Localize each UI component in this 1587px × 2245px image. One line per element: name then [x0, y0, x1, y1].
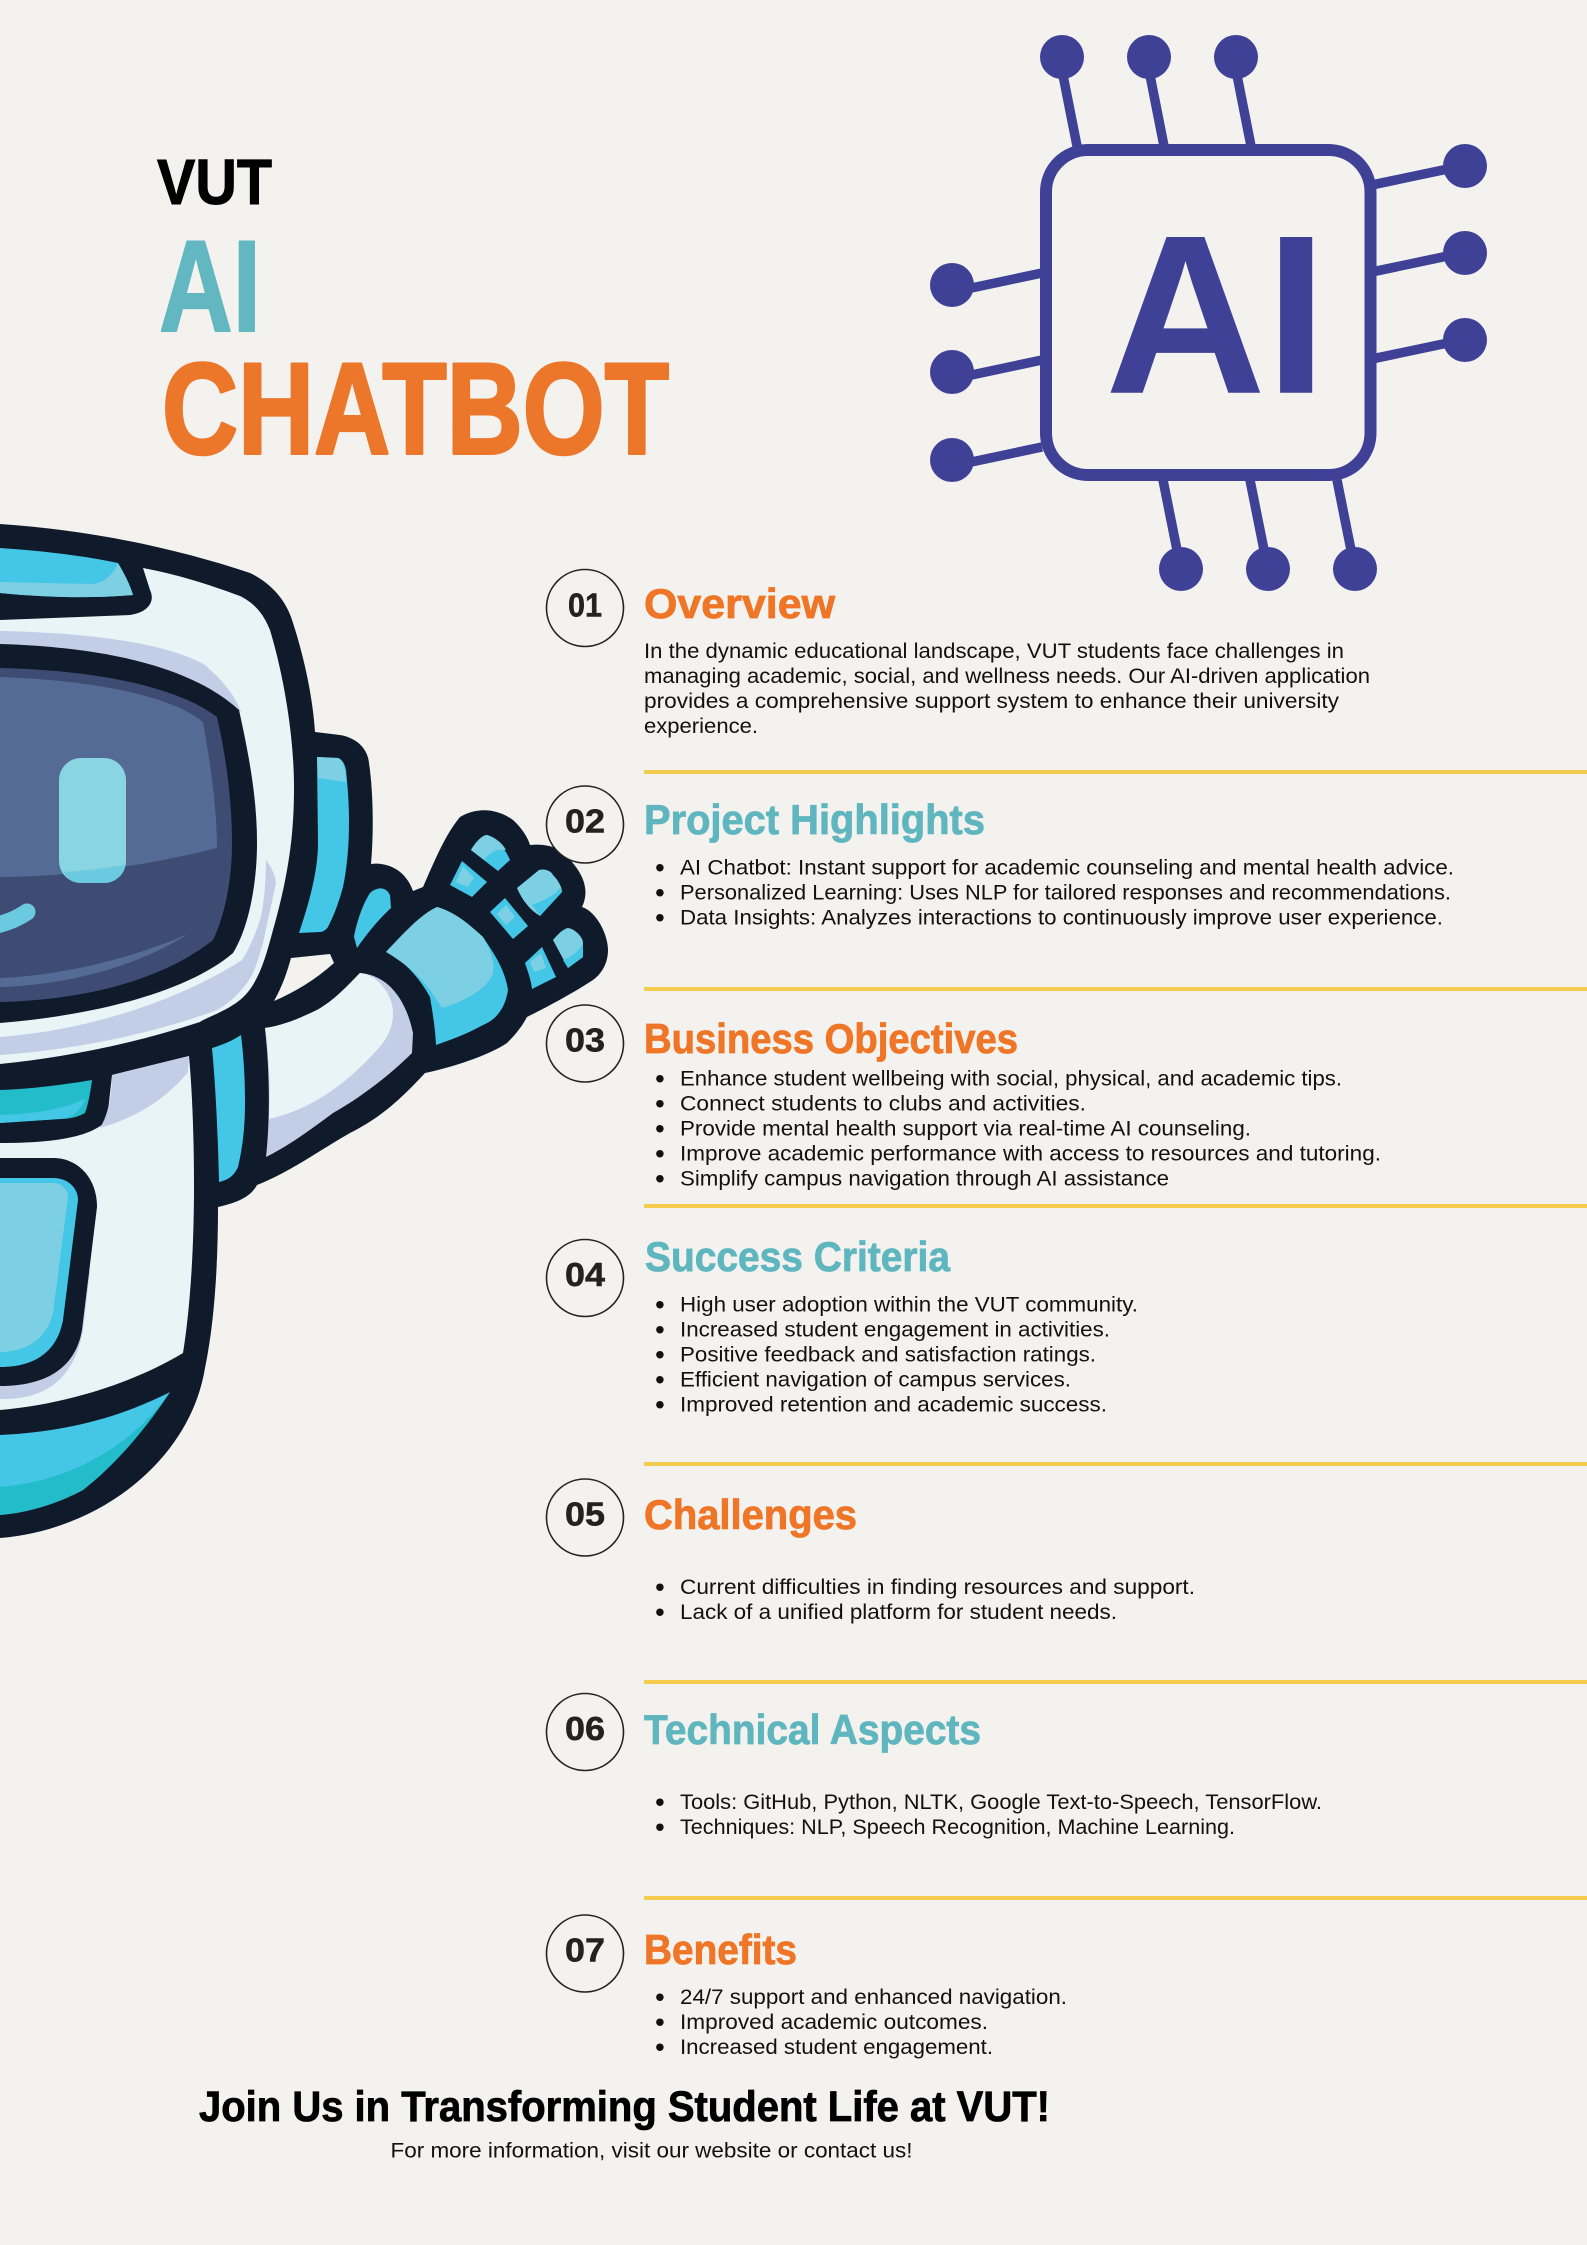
- number badge 05: 05: [565, 1496, 605, 1532]
- heading: business objectives: Business Objectives: [644, 1015, 1018, 1062]
- success criteria list: Increased student engagement in activities.: [680, 1318, 1110, 1342]
- overview paragraph: [644, 640, 1370, 738]
- business objectives list: •: [655, 1138, 665, 1169]
- number badge 03: 03: [565, 1022, 605, 1058]
- robot neck: [0, 1080, 92, 1123]
- section 02: project highlights: [546, 786, 1454, 933]
- footer note: For more information, visit our website or contact us!: [390, 2140, 912, 2162]
- footer call to action: [199, 2083, 1050, 2162]
- number badge 01: [546, 570, 624, 646]
- number badge 04: 04: [565, 1256, 606, 1293]
- business objectives list: Improve academic performance with access to resources and tutoring.: [680, 1142, 1381, 1166]
- section 06: technical aspects: [546, 1694, 1322, 1842]
- business objectives list: Enhance student wellbeing with social, physical, and academic tips.: [680, 1068, 1342, 1090]
- robot ear: [299, 757, 349, 933]
- technical aspects list: •: [655, 1812, 665, 1842]
- technical aspects list: Techniques: NLP, Speech Recognition, Machine Learning.: [680, 1816, 1235, 1839]
- heading: overview: Overview: [644, 580, 835, 627]
- benefits list: Improved academic outcomes.: [680, 2011, 988, 2034]
- success criteria list: •: [655, 1364, 665, 1395]
- number badge 02: [546, 786, 624, 863]
- section 01: overview: [546, 570, 1370, 738]
- business objectives list: •: [655, 1088, 665, 1119]
- business objectives list: [655, 1063, 1381, 1194]
- project highlights list: AI Chatbot: Instant support for academic counseling and mental health advice.: [680, 856, 1454, 880]
- business objectives list: •: [655, 1163, 665, 1194]
- section 05: challenges: [546, 1479, 1195, 1628]
- number badge 05: [546, 1479, 624, 1556]
- benefits list: •: [655, 1982, 665, 2012]
- number badge 03: [546, 1005, 624, 1082]
- section 04: success criteria: [546, 1233, 1138, 1420]
- success criteria list: Improved retention and academic success.: [680, 1394, 1107, 1416]
- title: CHATBOT: CHATBOT: [162, 336, 669, 482]
- technical aspects list: Tools: GitHub, Python, NLTK, Google Text-to-Speech, TensorFlow.: [680, 1791, 1322, 1814]
- heading: success criteria: Success Criteria: [645, 1233, 951, 1280]
- success criteria list: •: [655, 1314, 665, 1345]
- robot helmet: [0, 548, 294, 1064]
- icon: AI chip: [930, 35, 1487, 591]
- benefits list: 24/7 support and enhanced navigation.: [680, 1986, 1067, 2009]
- section 03: business objectives: [546, 1005, 1381, 1194]
- title: VUT: VUT: [157, 146, 272, 218]
- benefits list: •: [655, 2006, 665, 2038]
- project highlights list: •: [655, 852, 665, 883]
- number badge 06: 06: [565, 1710, 605, 1747]
- project highlights list: •: [655, 877, 665, 908]
- robot arm: [265, 888, 413, 1157]
- technical aspects list: [655, 1786, 1322, 1842]
- robot hand: [386, 835, 583, 1045]
- business objectives list: Provide mental health support via real-time AI counseling.: [680, 1118, 1251, 1140]
- number badge 01: 01: [568, 586, 602, 624]
- heading: technical aspects: Technical Aspects: [644, 1706, 981, 1753]
- number badge 06: [546, 1694, 624, 1770]
- title block: [157, 146, 669, 482]
- robot skirt: [0, 1392, 170, 1515]
- benefits list: Increased student engagement.: [680, 2036, 993, 2059]
- overview paragraph: In the dynamic educational landscape, VUT students face challenges in: [644, 640, 1344, 663]
- business objectives list: Connect students to clubs and activities.: [680, 1092, 1086, 1116]
- benefits list: [655, 1982, 1067, 2062]
- robot visor: [0, 644, 257, 1023]
- number badge 07: [546, 1915, 624, 1992]
- heading: project highlights: Project Highlights: [644, 796, 985, 843]
- business objectives list: •: [655, 1113, 665, 1144]
- overview paragraph: provides a comprehensive support system to enhance their university: [644, 690, 1340, 713]
- challenges list: Current difficulties in finding resources and support.: [680, 1576, 1195, 1599]
- success criteria list: Positive feedback and satisfaction ratings.: [680, 1344, 1096, 1366]
- project highlights list: •: [655, 902, 665, 933]
- project highlights list: Personalized Learning: Uses NLP for tailored responses and recommendations.: [680, 882, 1451, 904]
- benefits list: •: [655, 2032, 665, 2062]
- overview paragraph: managing academic, social, and wellness needs. Our AI-driven application: [644, 665, 1370, 688]
- footer heading: Join Us in Transforming Student Life at VUT!: [199, 2083, 1050, 2131]
- success criteria list: High user adoption within the VUT community.: [680, 1294, 1138, 1316]
- business objectives list: •: [655, 1063, 665, 1094]
- success criteria list: Efficient navigation of campus services.: [680, 1368, 1071, 1392]
- robot shoulder strap: [212, 1035, 245, 1182]
- technical aspects list: •: [655, 1786, 665, 1818]
- number badge 04: [546, 1240, 624, 1316]
- success criteria list: •: [655, 1389, 665, 1420]
- business objectives list: Simplify campus navigation through AI assistance: [680, 1168, 1169, 1190]
- number badge 02: 02: [565, 802, 605, 840]
- heading: benefits: Benefits: [644, 1926, 797, 1973]
- heading: challenges: Challenges: [644, 1491, 857, 1538]
- challenges list: •: [655, 1572, 665, 1602]
- success criteria list: [655, 1289, 1138, 1420]
- challenges list: [655, 1572, 1195, 1628]
- illustration: robot mascot: [0, 524, 608, 1538]
- project highlights list: [655, 852, 1454, 933]
- robot body: [0, 1056, 194, 1410]
- challenges list: •: [655, 1596, 665, 1628]
- challenges list: Lack of a unified platform for student needs.: [680, 1601, 1117, 1624]
- success criteria list: •: [655, 1289, 665, 1320]
- overview paragraph: experience.: [644, 715, 758, 738]
- icon: AI chip: AI: [1105, 188, 1327, 441]
- section 07: benefits: [546, 1915, 1067, 2062]
- number badge 07: 07: [565, 1932, 605, 1968]
- project highlights list: Data Insights: Analyzes interactions to continuously improve user experience.: [680, 906, 1443, 930]
- success criteria list: •: [655, 1339, 665, 1370]
- title: AI: AI: [159, 213, 261, 359]
